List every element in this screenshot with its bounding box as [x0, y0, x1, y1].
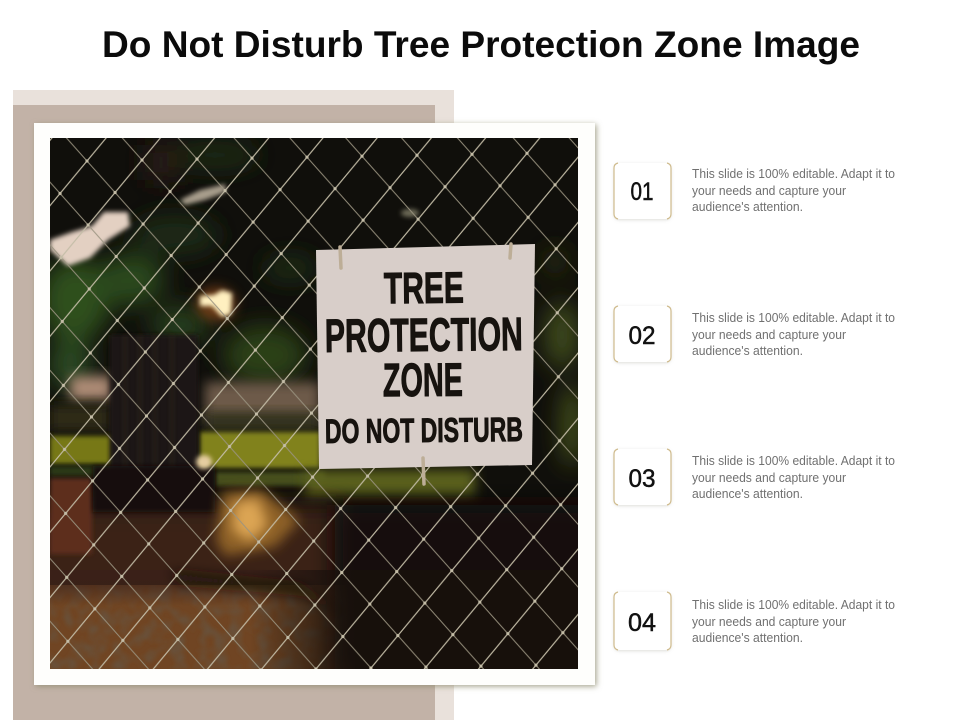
chain-link fence — [50, 138, 578, 669]
text block 04: audience's attention. — [692, 630, 803, 645]
number badge 01 — [614, 163, 671, 219]
item 03 — [614, 449, 895, 505]
item 01 — [614, 163, 895, 219]
title: Do Not Disturb Tree Protection Zone Image — [102, 24, 860, 65]
sign: TREE — [384, 264, 464, 313]
number badge 02: 02 — [628, 322, 656, 350]
sun flare — [196, 287, 236, 321]
text block 01: audience's attention. — [692, 199, 803, 214]
number badge 01: 01 — [630, 178, 654, 206]
number badge 02 — [614, 306, 671, 362]
number badge 03: 03 — [628, 465, 656, 493]
text block 04: your needs and capture your — [692, 614, 847, 629]
item 02 — [614, 306, 895, 362]
text block 01: This slide is 100% editable. Adapt it to — [692, 166, 895, 181]
text block 03: audience's attention. — [692, 486, 803, 501]
panel: light backdrop — [13, 90, 454, 720]
number badge 03 — [614, 449, 671, 505]
text block 02: your needs and capture your — [692, 327, 847, 342]
number badge 04 — [614, 592, 671, 650]
fence post and base — [93, 335, 215, 512]
text block 02: This slide is 100% editable. Adapt it to — [692, 310, 895, 325]
lower scene — [70, 376, 112, 400]
sign — [316, 244, 535, 484]
text block 04: This slide is 100% editable. Adapt it to — [692, 597, 895, 612]
photo: tree protection zone sign on chain-link fence — [30, 138, 595, 680]
panel: dark backdrop — [13, 105, 435, 720]
panel: white photo frame — [34, 123, 595, 685]
text block 03: your needs and capture your — [692, 470, 847, 485]
number badge 04: 04 — [628, 609, 656, 637]
sign: DO NOT DISTURB — [325, 411, 523, 451]
text block 01: your needs and capture your — [692, 183, 847, 198]
item 04 — [614, 592, 895, 650]
sign: ZONE — [383, 353, 463, 406]
sign: PROTECTION — [325, 307, 523, 362]
text block 03: This slide is 100% editable. Adapt it to — [692, 453, 895, 468]
text block 02: audience's attention. — [692, 343, 803, 358]
sky patches — [50, 184, 419, 266]
sunlit path — [216, 490, 300, 556]
